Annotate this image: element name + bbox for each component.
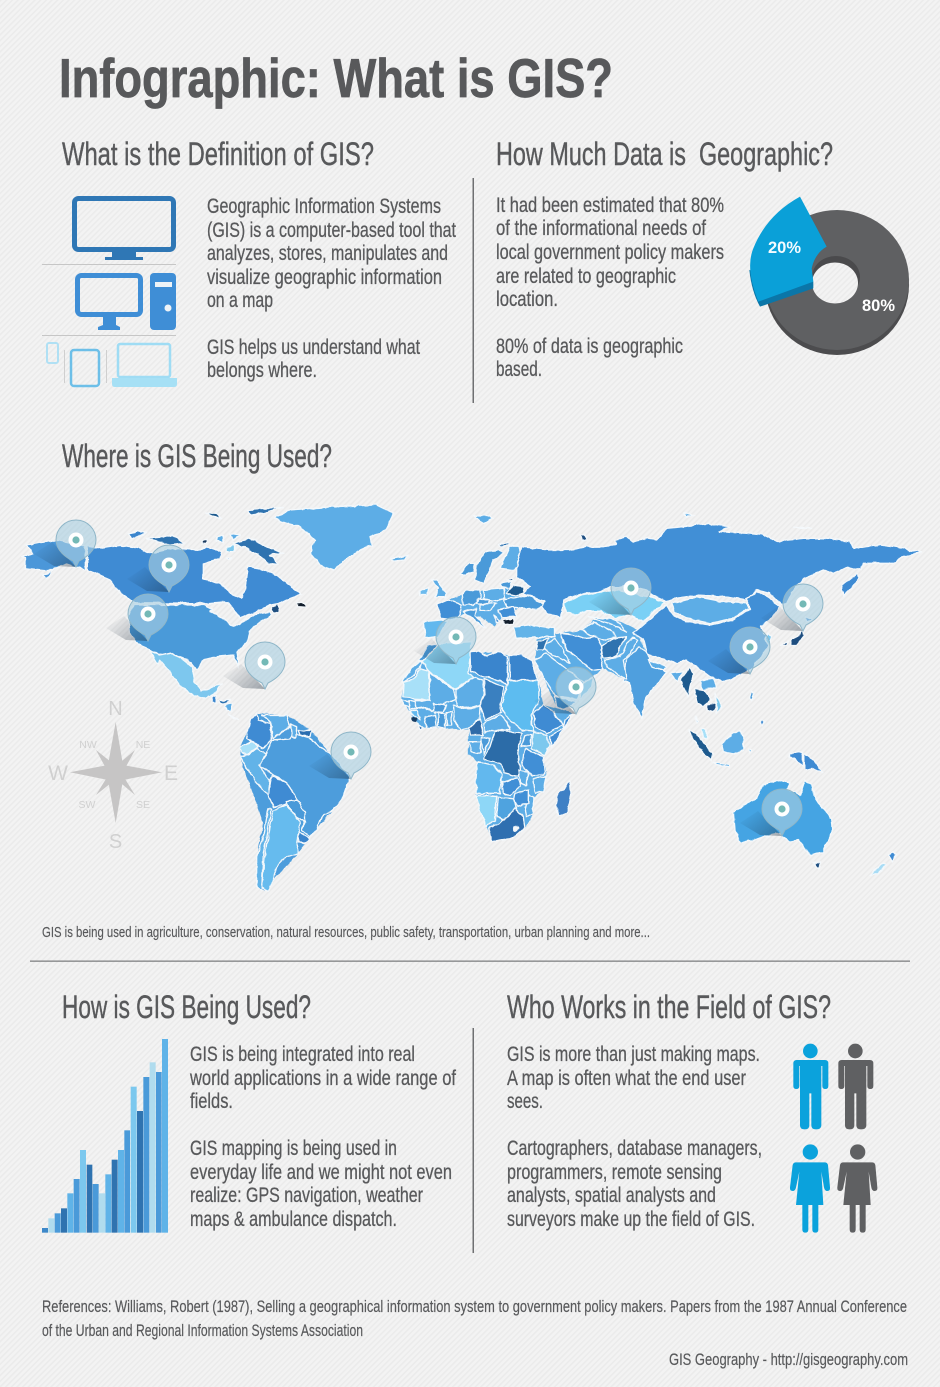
- map pin: Spain: [414, 617, 476, 664]
- compass rose: SW: [79, 799, 96, 811]
- text: geographic data: 80% of data is geographic: [496, 335, 683, 358]
- text: definition: analyzes, stores, manipulates and: [207, 242, 448, 265]
- text: definition: GIS helps us understand what: [207, 336, 420, 359]
- text: geographic data: of the informational needs of: [496, 217, 706, 240]
- icon: laptop: [112, 344, 177, 387]
- icon: tablet: [71, 350, 99, 386]
- icon: people: [790, 1044, 877, 1233]
- text: definition: belongs where.: [207, 359, 317, 382]
- text: definition: Geographic Information Systems: [207, 195, 441, 218]
- text: geographic data: location.: [496, 288, 558, 311]
- map pin: western USA: [106, 594, 168, 641]
- bar chart: [42, 1039, 168, 1233]
- world map: [22, 505, 922, 892]
- compass rose: SE: [136, 799, 150, 811]
- map: Africa: [402, 642, 573, 842]
- donut chart: 20% and 80%: [749, 197, 909, 355]
- text: definition: visualize geographic information: [207, 266, 442, 289]
- compass rose: W: [48, 762, 68, 785]
- text: how used: GIS mapping is being used in: [190, 1137, 397, 1160]
- map: Americas: [22, 505, 408, 892]
- text: how used: GIS is being integrated into real: [190, 1043, 415, 1066]
- icon: desktop computer: [78, 273, 176, 330]
- compass rose: E: [164, 762, 178, 785]
- text: who works: Cartographers, database managers,: [507, 1137, 762, 1160]
- compass rose: NW: [79, 739, 97, 751]
- text: who works: sees.: [507, 1090, 543, 1113]
- text: definition: [207, 195, 456, 382]
- compass rose: [48, 698, 178, 853]
- references: [42, 1297, 907, 1340]
- text: definition: (GIS) is a computer-based tool that: [207, 219, 456, 242]
- text: geographic data: It had been estimated that 80%: [496, 194, 724, 217]
- map pin: Caribbean: [223, 642, 285, 689]
- text: who works: analysts, spatial analysts and: [507, 1184, 716, 1207]
- text: who works: GIS is more than just making maps.: [507, 1043, 760, 1066]
- text: geographic data: are related to geographic: [496, 265, 676, 288]
- text: who works: [507, 1043, 762, 1231]
- references: of the Urban and Regional Information Systems Association: [42, 1321, 363, 1340]
- compass rose: N: [108, 698, 123, 720]
- map pin: Australia: [740, 789, 802, 836]
- map pin: Brazil: [309, 732, 371, 779]
- text: how used: [189, 1043, 456, 1231]
- text: who works: A map is often what the end user: [507, 1067, 746, 1090]
- map: Europe: [420, 543, 543, 638]
- map: land masses: [22, 505, 922, 892]
- icon: woman blue: [790, 1144, 830, 1233]
- heading: where: Where is GIS Being Used?: [62, 438, 332, 474]
- map pin: China: [708, 627, 770, 674]
- compass rose: S: [109, 831, 122, 853]
- label: 20%: 20%: [768, 238, 801, 257]
- text: geographic data: local government policy makers: [496, 241, 724, 264]
- icon: man gray: [838, 1044, 873, 1129]
- map pin: Arabian Peninsula: [534, 667, 596, 714]
- map: Asia and Oceania: [473, 513, 922, 875]
- map pin: Canada: [127, 545, 189, 592]
- compass rose: NE: [136, 739, 150, 751]
- icon: large monitor: [74, 198, 174, 260]
- text: who works: programmers, remote sensing: [507, 1161, 722, 1184]
- text: how used: everyday life and we might not even: [190, 1161, 452, 1184]
- icon: phone: [47, 343, 58, 363]
- map pin: Alaska: [34, 520, 96, 567]
- text: how used: realize: GPS navigation, weather: [190, 1184, 423, 1207]
- text: how used: world applications in a wide range of: [189, 1067, 456, 1090]
- text: geographic data: [496, 194, 724, 381]
- text: how used: maps & ambulance dispatch.: [190, 1208, 397, 1231]
- icon: man blue: [793, 1044, 828, 1129]
- label: 80%: 80%: [862, 296, 895, 315]
- text: how used: fields.: [190, 1090, 233, 1113]
- map pin: Kazakhstan: [589, 568, 651, 615]
- map caption: GIS is being used in agriculture, conservation, natural resources, public safety, transportation, urban planning and more...: [42, 924, 650, 941]
- title: Infographic: What is GIS?: [59, 47, 613, 109]
- text: definition: on a map: [207, 289, 273, 312]
- text: geographic data: based.: [496, 358, 542, 381]
- text: who works: surveyors make up the field of GIS.: [507, 1208, 755, 1231]
- icon: devices: [42, 198, 177, 387]
- map pin: Russian Far East: [761, 584, 823, 631]
- heading: definition: What is the Definition of GIS?: [62, 136, 374, 172]
- heading: how used: How is GIS Being Used?: [62, 989, 311, 1025]
- icon: woman gray: [837, 1144, 877, 1233]
